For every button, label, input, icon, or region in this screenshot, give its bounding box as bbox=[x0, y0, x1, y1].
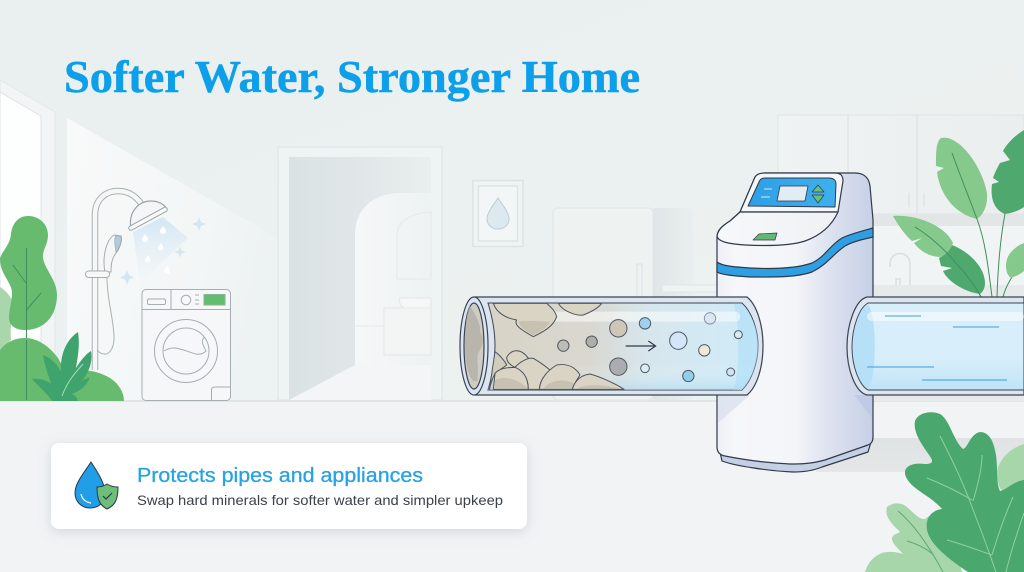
body shadows under pipes bbox=[718, 395, 750, 423]
pipe shell bbox=[475, 297, 763, 395]
kitchen cabinets and counter bbox=[778, 115, 1024, 472]
blue end tint bbox=[853, 304, 875, 389]
light leaf low bbox=[893, 216, 953, 257]
pale left leaf bbox=[865, 503, 962, 572]
highlight band bbox=[517, 312, 740, 322]
green button bbox=[753, 233, 777, 240]
right pipe with clean water bbox=[847, 297, 1024, 395]
stem over bush bbox=[26, 340, 28, 400]
lid bbox=[717, 212, 838, 246]
dark oak leaf bbox=[905, 412, 1024, 572]
card heading: Protects pipes and appliances bbox=[137, 465, 423, 487]
title: Softer Water, Stronger Home bbox=[64, 52, 640, 102]
right plant behind softener bbox=[893, 130, 1024, 297]
pipe shell bbox=[847, 297, 1024, 395]
up and down buttons bbox=[812, 185, 824, 203]
mineral rocks bbox=[489, 303, 624, 390]
water softener unit bbox=[717, 173, 873, 472]
pipe rim bbox=[460, 297, 488, 395]
front right foliage bbox=[865, 412, 1024, 572]
control head bbox=[740, 173, 843, 212]
rocks and particles bbox=[489, 303, 758, 390]
bottom bush bbox=[0, 338, 124, 401]
rock shading bbox=[495, 321, 620, 389]
sparkles bbox=[120, 217, 206, 285]
main body bbox=[717, 173, 873, 464]
pale background leaf bbox=[0, 287, 13, 350]
pale leaf behind bbox=[997, 444, 1024, 492]
hand shower and hose bbox=[86, 235, 122, 354]
shower fixture bbox=[86, 191, 188, 370]
dark leaf top bbox=[992, 130, 1024, 214]
oak leaf veins bbox=[927, 436, 1024, 572]
light leaf top bbox=[936, 138, 987, 219]
left pipe with mineral scale bbox=[460, 297, 763, 395]
icon: water drop with shield bbox=[75, 462, 118, 509]
left foliage bbox=[0, 216, 124, 401]
framed water drop picture bbox=[473, 180, 523, 246]
doorway with bathroom beyond bbox=[278, 147, 442, 400]
stems bbox=[915, 150, 1024, 297]
washing machine bbox=[142, 290, 230, 400]
pipe interior bbox=[852, 303, 1024, 390]
shower head bbox=[130, 201, 167, 228]
leaf veins bbox=[915, 153, 981, 297]
dark fronds bbox=[32, 332, 92, 401]
pipe opening bbox=[464, 303, 484, 389]
display panel bbox=[748, 178, 836, 207]
blue band bbox=[717, 228, 873, 277]
window at left bbox=[0, 80, 55, 400]
display lines bbox=[761, 189, 772, 197]
water flow lines bbox=[867, 316, 1007, 380]
blue end tint bbox=[733, 303, 758, 390]
dark leaf low bbox=[939, 245, 985, 294]
card background bbox=[51, 443, 527, 529]
base bbox=[720, 442, 871, 472]
flow arrow bbox=[626, 341, 656, 351]
interior shading bbox=[488, 303, 758, 390]
refrigerator bbox=[553, 208, 778, 400]
display screen bbox=[777, 186, 808, 201]
pale leaf veins bbox=[898, 511, 943, 572]
info card bbox=[51, 443, 527, 529]
round green tree bbox=[0, 216, 57, 330]
sunlight beam on wall bbox=[67, 118, 278, 400]
particles bbox=[558, 313, 742, 382]
light leaf right bbox=[1006, 243, 1024, 278]
tree stem bbox=[13, 248, 41, 400]
card body text: Swap hard minerals for softer water and simpler upkeep bbox=[137, 492, 503, 508]
opening rocks bbox=[465, 306, 483, 381]
highlight band bbox=[867, 312, 1024, 321]
riser pipe bbox=[95, 191, 142, 370]
water spray bbox=[133, 217, 188, 283]
pipe interior bbox=[488, 303, 758, 390]
